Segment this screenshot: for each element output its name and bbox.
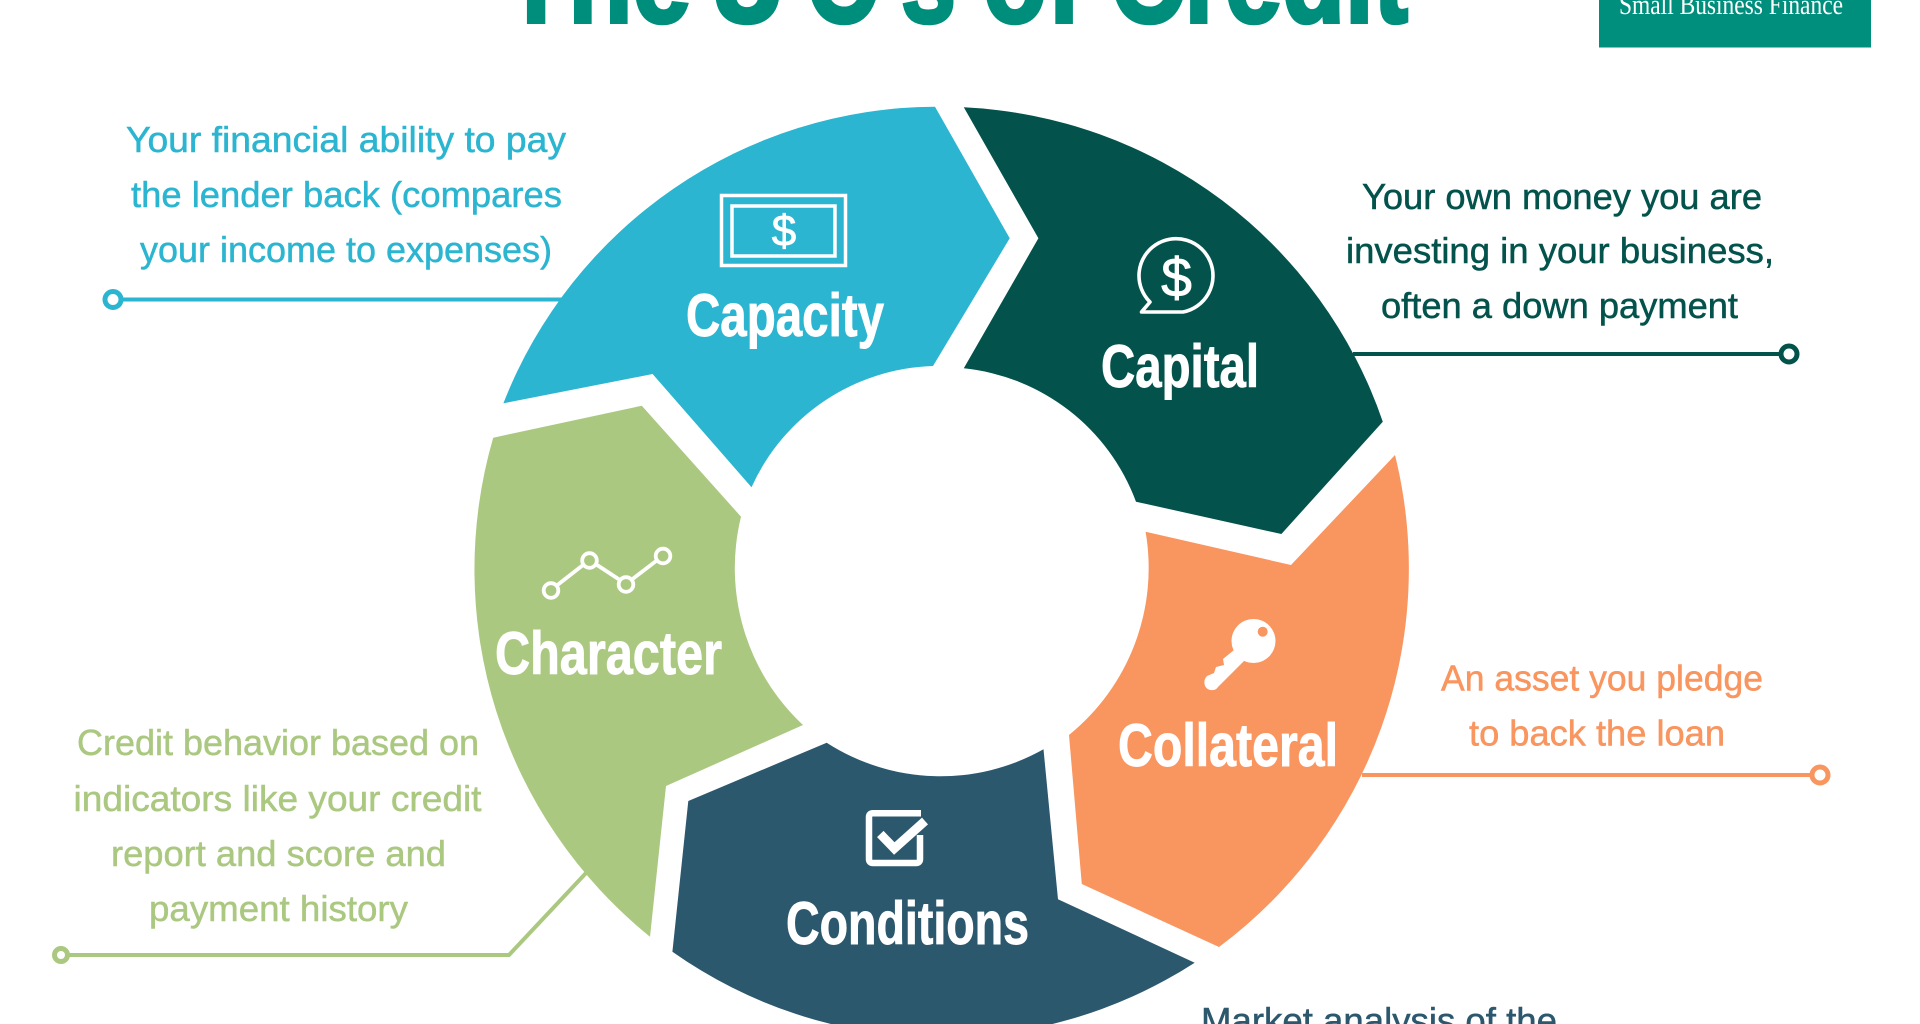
- icon: banknote: [722, 196, 846, 266]
- connector: capital: [1353, 346, 1797, 362]
- description: character: report and score and: [111, 833, 446, 874]
- icon: speech bubble with dollar: [1139, 239, 1213, 312]
- segment: conditions: [672, 743, 1195, 1024]
- icon: key: [1204, 619, 1276, 690]
- description: capacity: [126, 119, 566, 270]
- connector: character: [54, 873, 586, 962]
- segment: capacity: [503, 107, 1010, 487]
- label: capital: Capital: [1101, 333, 1259, 400]
- panel: capacity: [503, 107, 1010, 487]
- connector: collateral: [1362, 767, 1828, 783]
- description: capital: Your own money you are: [1362, 176, 1762, 217]
- description: collateral: An asset you pledge: [1441, 658, 1763, 698]
- description: character: Credit behavior based on: [77, 722, 479, 763]
- label: conditions: Conditions: [786, 890, 1029, 957]
- connector: capacity: [105, 292, 563, 308]
- description: character: [74, 722, 482, 929]
- panel: collateral: [1069, 455, 1409, 947]
- description: character: payment history: [149, 888, 408, 929]
- icon: checkbox: [869, 813, 925, 863]
- label: collateral: Collateral: [1118, 712, 1338, 779]
- panel: character: [474, 406, 803, 937]
- description: capital: [1346, 176, 1774, 326]
- icon: banknote: $: [772, 206, 796, 256]
- panel: conditions: [672, 743, 1195, 1024]
- icon: line chart: [544, 549, 670, 598]
- segment: character: [474, 406, 803, 937]
- description: capital: often a down payment: [1381, 285, 1738, 326]
- description: capacity: Your financial ability to pay: [126, 119, 566, 160]
- label: capacity: Capacity: [686, 282, 884, 349]
- description: character: indicators like your credit: [74, 778, 482, 819]
- logo badge: [1599, 0, 1871, 48]
- panel: capital: [964, 107, 1383, 534]
- label: character: Character: [495, 620, 722, 687]
- title: [504, 0, 1408, 50]
- description: collateral: to back the loan: [1469, 712, 1725, 754]
- description: capital: investing in your business,: [1346, 230, 1774, 271]
- description: collateral: [1441, 658, 1763, 754]
- description: capacity: your income to expenses): [140, 229, 552, 270]
- description: capacity: the lender back (compares: [131, 174, 562, 215]
- icon: speech bubble with dollar: $: [1161, 246, 1192, 308]
- segment: collateral: [1069, 455, 1409, 947]
- segment: capital: [964, 107, 1383, 534]
